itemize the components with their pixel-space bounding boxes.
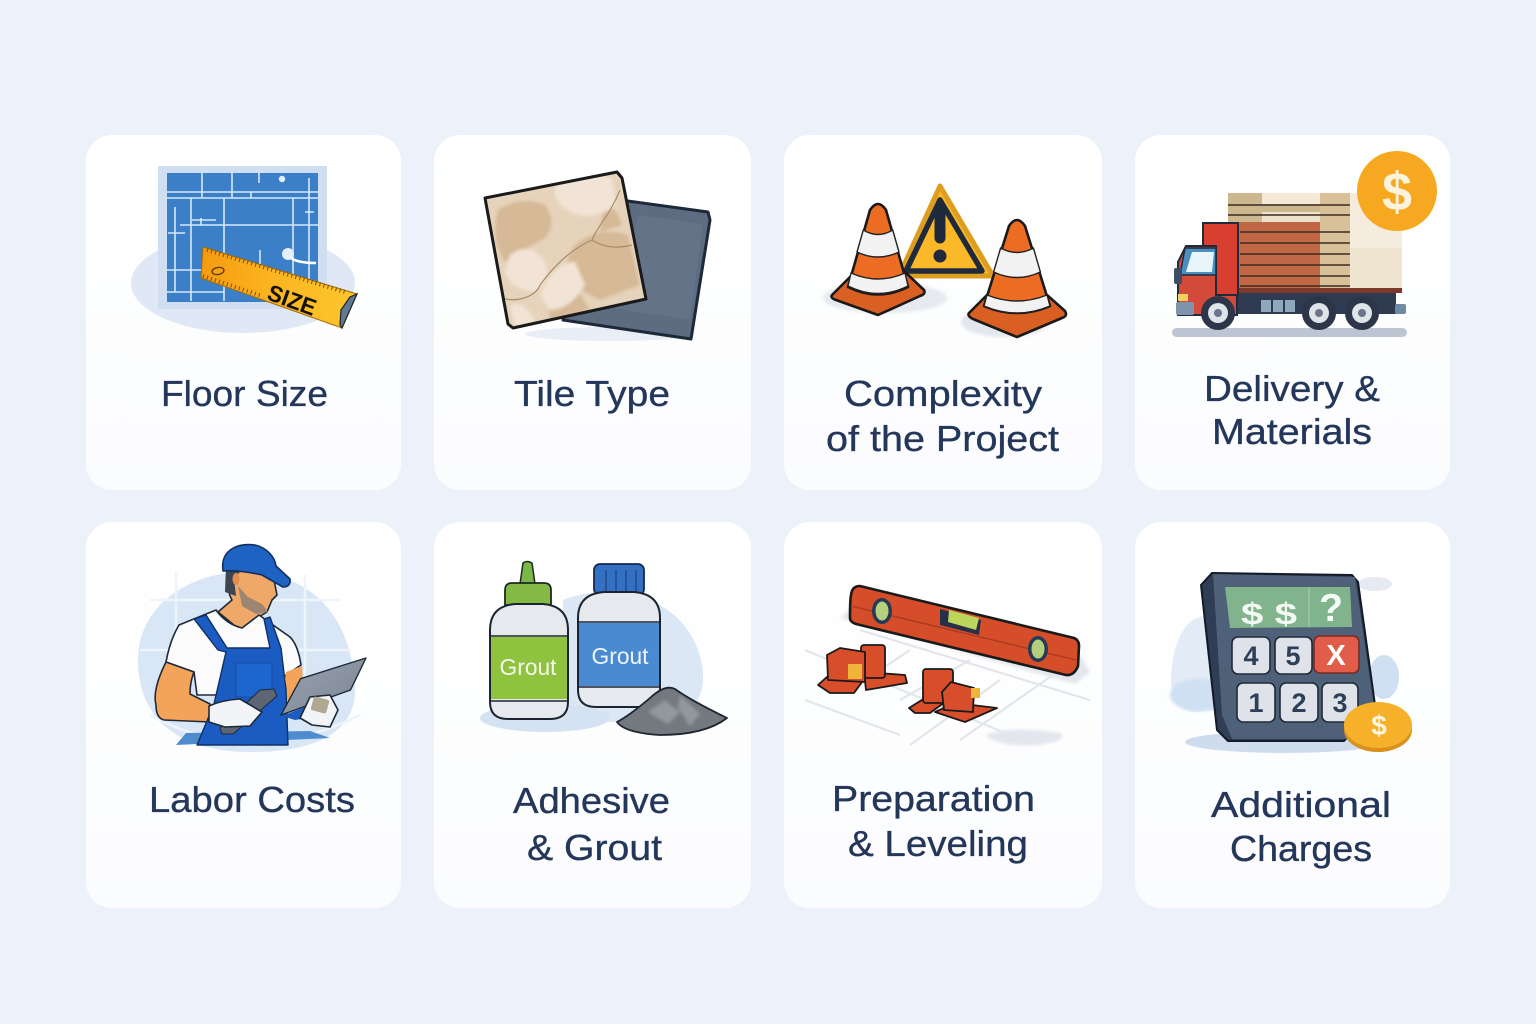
icon: dollar coin: $ (1382, 162, 1412, 222)
heading: delivery: Delivery & (1204, 368, 1380, 409)
heading: preparation: Preparation (832, 778, 1035, 819)
icon: calculator and coin (1170, 573, 1412, 753)
icon: calculator and coin: $ $ (1241, 596, 1297, 631)
heading: labor: Labor Costs (149, 779, 355, 820)
neck and face (218, 565, 277, 630)
heading: complexity: Complexity (844, 373, 1042, 414)
spacer group one (818, 645, 907, 693)
keypad: 5 (1285, 641, 1301, 671)
keypad: 3 (1332, 688, 1348, 718)
grout powder pile (617, 688, 727, 735)
icon: blueprint and tape measure (131, 166, 357, 333)
coin: $ (1371, 710, 1387, 741)
icon: traffic cones and warning sign (823, 186, 1066, 337)
blue bottle (578, 564, 660, 707)
heading: delivery: Materials (1212, 411, 1372, 452)
cap (223, 545, 290, 587)
panel: floor size (86, 135, 401, 490)
spacer group two (909, 669, 997, 722)
green bottle (490, 562, 568, 719)
keypad (1232, 636, 1359, 722)
keypad: 2 (1291, 688, 1307, 718)
heading: adhesive: Adhesive (513, 780, 670, 821)
keypad: X (1326, 640, 1346, 672)
heading: preparation: & Leveling (848, 823, 1028, 864)
panel: additional charges (1135, 522, 1450, 908)
coin (1344, 702, 1412, 752)
heading: floor size: Floor Size (161, 373, 328, 414)
keypad: 4 (1243, 641, 1259, 671)
tape label: SIZE (264, 279, 320, 321)
panel: labor (86, 522, 401, 908)
blue bottle: Grout (592, 643, 649, 669)
icon: bottles and powder (480, 562, 727, 735)
green bottle: Grout (500, 654, 557, 680)
heading: adhesive: & Grout (527, 827, 662, 868)
icon: dollar coin (1357, 151, 1437, 231)
panel: complexity (784, 135, 1102, 490)
arms and shirt (166, 610, 301, 695)
icon: stone tiles (485, 172, 710, 341)
icon: worker with trowel (138, 545, 366, 752)
icon: delivery truck (1172, 151, 1437, 337)
overalls (194, 615, 288, 745)
heading: additional charges: Additional (1211, 784, 1391, 825)
keypad: 1 (1248, 688, 1264, 718)
panel: tile type (434, 135, 751, 490)
heading: tile type: Tile Type (514, 373, 670, 414)
icon: spirit level and spacers (805, 586, 1090, 746)
panel: preparation (784, 522, 1102, 908)
heading: additional charges: Charges (1230, 828, 1372, 869)
heading: complexity: of the Project (826, 418, 1059, 459)
panel: adhesive and grout (434, 522, 751, 908)
icon: calculator and coin: ? (1319, 587, 1343, 630)
panel: delivery (1135, 135, 1450, 490)
